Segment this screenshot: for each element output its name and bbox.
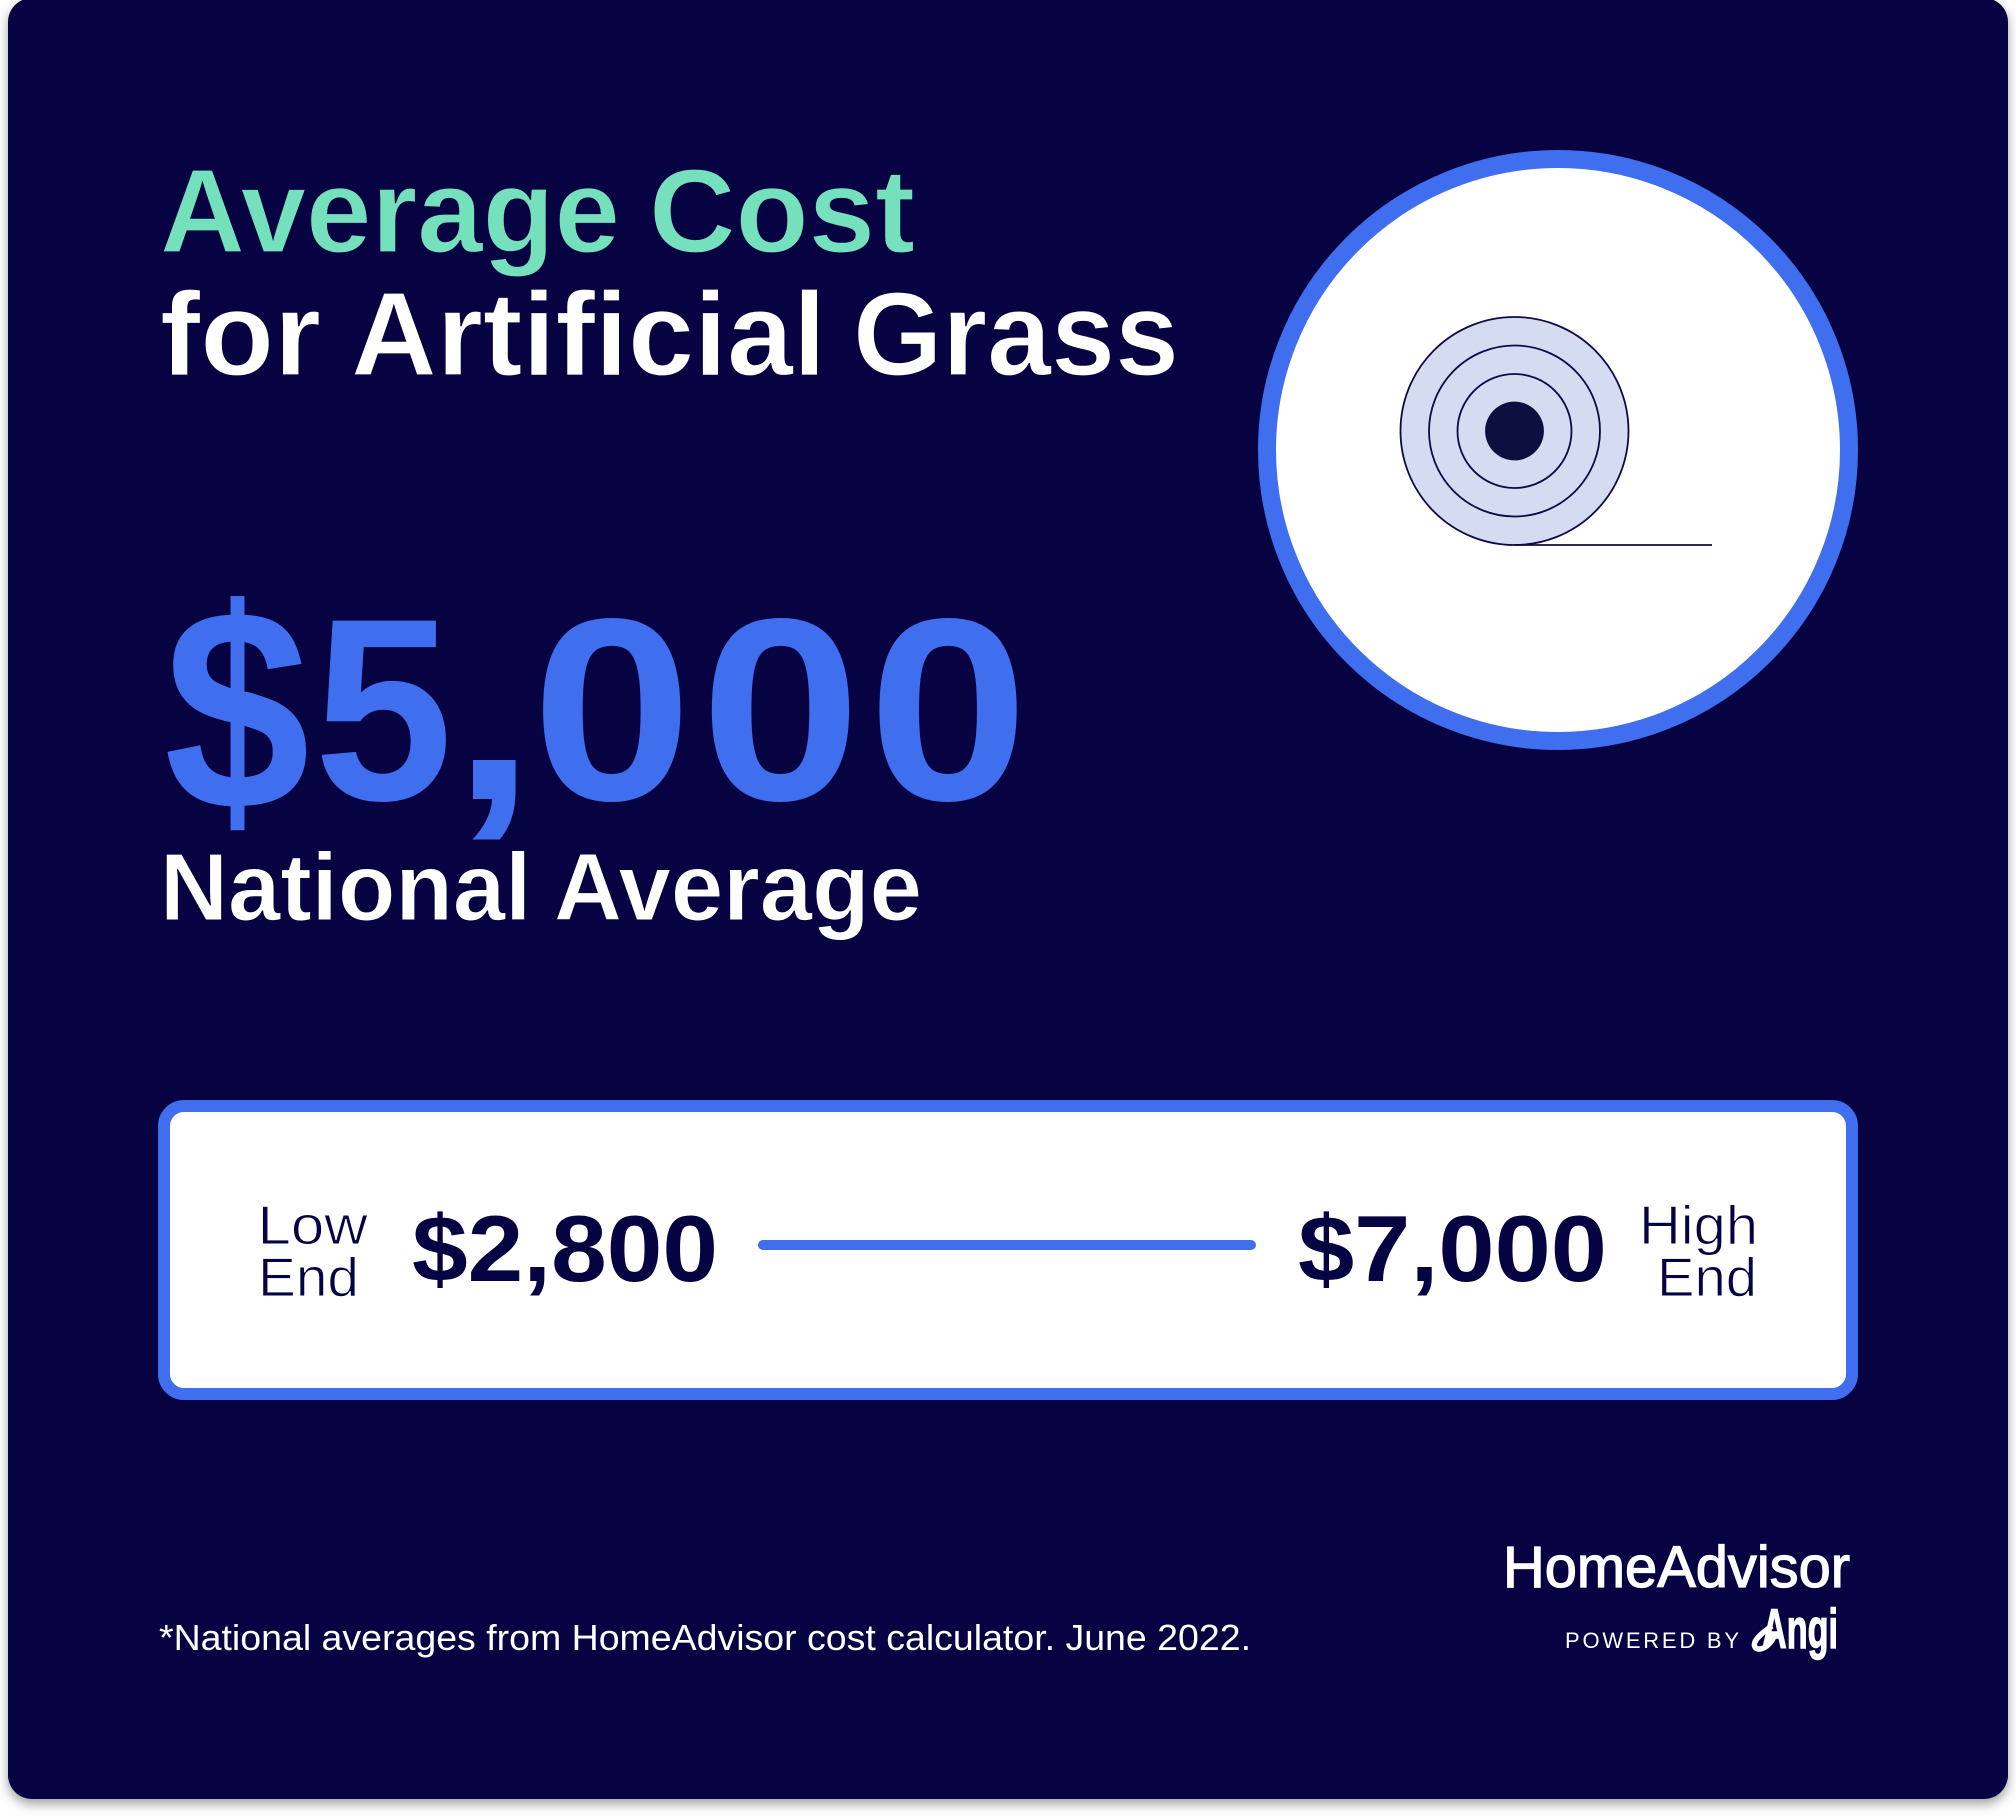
low end price: $2,800 — [412, 1196, 718, 1301]
title line: Average Cost — [160, 145, 915, 278]
title — [160, 145, 1179, 401]
range box — [164, 1106, 1852, 1394]
title line: for Artificial Grass: Artificial — [351, 268, 826, 401]
title line: for Artificial Grass: Grass — [853, 268, 1179, 401]
low end label: End — [258, 1246, 359, 1308]
HomeAdvisor wordmark: HomeAdvisor — [1503, 1535, 1850, 1600]
title line: Average Cost: Average — [160, 145, 620, 278]
icon: rolled artificial turf in circle — [1267, 159, 1849, 741]
national average figure: 5 — [314, 565, 453, 856]
turf roll — [1400, 317, 1712, 545]
powered by line: POWERED BY — [1565, 1628, 1739, 1653]
high end label: High — [1639, 1194, 1758, 1256]
national average figure — [164, 550, 1029, 871]
high end label — [1639, 1194, 1758, 1308]
footnote: *National averages from HomeAdvisor cost calculator. June 2022. — [159, 1617, 1251, 1658]
low end label — [258, 1194, 368, 1308]
national average label: National Average — [160, 834, 922, 941]
low end label: Low — [258, 1194, 368, 1256]
national average figure: $ — [164, 550, 310, 871]
icon background circle — [1267, 159, 1849, 741]
high end price: $7,000 — [1298, 1196, 1607, 1301]
national average figure: , — [452, 561, 536, 855]
title line: for Artificial Grass: for — [160, 268, 321, 401]
panel: price range — [164, 1106, 1852, 1394]
Angi wordmark: Angi — [1762, 1597, 1838, 1660]
logo: HomeAdvisor powered by Angi — [1503, 1535, 1850, 1660]
title line: Average Cost: Cost — [649, 145, 915, 278]
Angi logo swash — [1754, 1626, 1775, 1649]
title line: for Artificial Grass — [160, 268, 1179, 401]
national average figure: 000 — [532, 565, 1029, 855]
range line — [758, 1240, 1256, 1250]
high end label: End — [1657, 1246, 1757, 1308]
